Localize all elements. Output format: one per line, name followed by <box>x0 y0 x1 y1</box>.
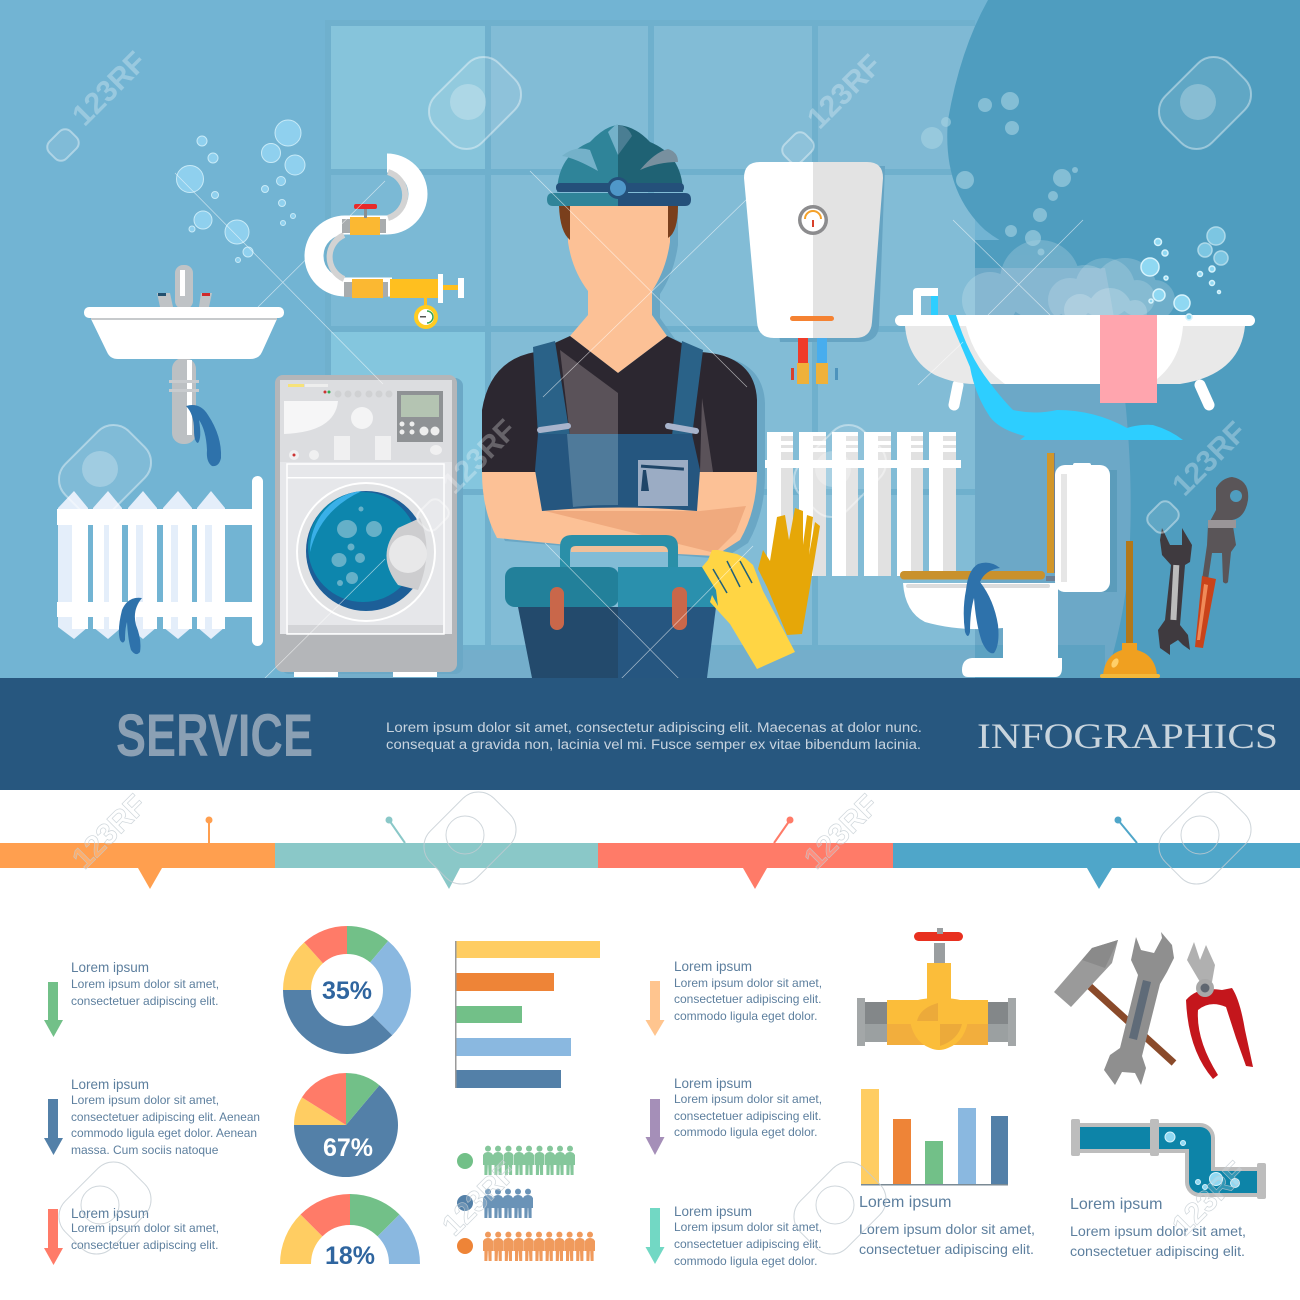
watermarks over illustration: 123RF <box>801 48 888 136</box>
hair <box>559 206 678 240</box>
banner description text: Lorem ipsum dolor sit amet, consectetur adipiscing elit. Maecenas at dolor nunc. <box>386 720 922 735</box>
text block 6: Lorem ipsum <box>674 1204 752 1219</box>
shirt <box>482 336 757 472</box>
banner description text <box>386 720 922 752</box>
blue people row <box>483 1189 533 1218</box>
white lower background <box>0 790 1300 1300</box>
watermarks over illustration: 123RF <box>436 413 523 501</box>
text block 8: Lorem ipsum dolor sit amet, <box>1070 1223 1246 1239</box>
helmet <box>547 124 691 206</box>
radiator right <box>757 432 961 576</box>
icon: pipe valve <box>857 928 1016 1050</box>
icon: hammer, wrench and pliers <box>1054 932 1253 1085</box>
window tiles <box>325 20 975 678</box>
banner heading: infographics: INFOGRAPHICS <box>977 716 1278 756</box>
bubbles over bathtub <box>1141 227 1228 320</box>
watermarks over infographic: 123RF <box>66 788 153 876</box>
banner <box>0 678 1300 790</box>
text block 4: commodo ligula eget dolor. <box>674 1009 817 1023</box>
toilet <box>900 453 1117 677</box>
green people row <box>483 1146 575 1175</box>
rubber gloves <box>702 508 820 669</box>
donut chart 35%: 35% <box>322 977 372 1005</box>
text block 6: commodo ligula eget dolor. <box>674 1254 817 1268</box>
text block 1: Lorem ipsum dolor sit amet, <box>71 977 219 991</box>
text block 3: Lorem ipsum <box>71 1206 149 1221</box>
gauge chart 18% <box>280 1194 420 1270</box>
watermarks over infographic: 123RF <box>798 788 885 876</box>
donut chart 35% <box>297 940 397 1040</box>
text block 3: consectetuer adipiscing elit. <box>71 1238 218 1252</box>
text block 4: consectetuer adipiscing elit. <box>674 992 821 1006</box>
bathtub <box>895 288 1255 440</box>
spanner <box>1104 932 1174 1085</box>
orange people row <box>483 1232 595 1261</box>
icon: leaking pipe <box>1071 1119 1266 1199</box>
text block 4 <box>674 959 822 1023</box>
text block 6 <box>674 1204 822 1268</box>
plumber figure <box>482 124 765 559</box>
arrow: green <box>44 982 63 1037</box>
pie chart 67% <box>294 1073 398 1177</box>
bubbles above sink <box>176 120 305 262</box>
hammer <box>1054 940 1174 1063</box>
overalls <box>533 341 703 511</box>
people chart <box>457 1146 595 1261</box>
watermarks over infographic <box>50 783 1260 1263</box>
gauge chart 18%: 18% <box>325 1242 375 1270</box>
text block 5 <box>674 1076 822 1139</box>
horizontal bar chart <box>455 941 600 1088</box>
text block 1: Lorem ipsum <box>71 960 149 975</box>
thin diagonal watermark lines <box>175 171 1083 690</box>
face and neck <box>568 206 670 373</box>
vertical bar chart <box>861 1089 1008 1186</box>
steam cloud <box>962 240 1175 332</box>
text block 6: Lorem ipsum dolor sit amet, <box>674 1220 822 1234</box>
text block 8: Lorem ipsum <box>1070 1196 1162 1213</box>
text block 5: consectetuer adipiscing elit. <box>674 1109 821 1123</box>
washing machine <box>275 375 463 677</box>
arms <box>482 472 757 556</box>
arrow: purple <box>646 1099 664 1155</box>
water heater <box>744 162 885 384</box>
banner description text: consequat a gravida non, lacinia vel mi. Fusce semper ex vitae bibendum lacinia. <box>386 737 921 752</box>
timeline bar <box>0 816 1300 889</box>
pie chart 67%: 67% <box>323 1134 373 1162</box>
illustration panel: plumber room scene <box>0 0 1300 690</box>
text block 2: Lorem ipsum dolor sit amet, <box>71 1093 219 1107</box>
text block 5: Lorem ipsum <box>674 1076 752 1091</box>
text block 7 <box>859 1194 1035 1257</box>
banner heading: service: SERVICE <box>116 702 313 769</box>
valve pipe <box>314 163 464 329</box>
watermarks over infographic: 123RF <box>1166 1155 1253 1243</box>
text block 2: consectetuer adipiscing elit. Aenean <box>71 1110 260 1124</box>
text block 2: massa. Cum sociis natoque <box>71 1143 219 1157</box>
text block 1 <box>71 960 219 1008</box>
arrow: blue <box>44 1099 63 1155</box>
text block 2: Lorem ipsum <box>71 1077 149 1092</box>
text block 6: consectetuer adipiscing elit. <box>674 1237 821 1251</box>
text block 7: Lorem ipsum dolor sit amet, <box>859 1221 1035 1237</box>
arrow: peach <box>646 981 664 1036</box>
pliers <box>1186 942 1253 1079</box>
text block 2: commodo ligula eget dolor. Aenean <box>71 1126 257 1140</box>
arrow: mint <box>646 1208 664 1264</box>
text block 3 <box>71 1206 219 1252</box>
text block 2 <box>71 1077 260 1157</box>
watermarks over illustration: 123RF <box>66 45 153 133</box>
watermarks over illustration: 123RF <box>1166 415 1253 503</box>
pipe wrench <box>1195 477 1248 648</box>
text block 5: commodo ligula eget dolor. <box>674 1125 817 1139</box>
plunger <box>1100 541 1160 678</box>
text block 8: consectetuer adipiscing elit. <box>1070 1243 1245 1259</box>
text block 5: Lorem ipsum dolor sit amet, <box>674 1092 822 1106</box>
text block 7: consectetuer adipiscing elit. <box>859 1241 1034 1257</box>
sink <box>84 265 284 466</box>
text block 8 <box>1070 1196 1246 1259</box>
text block 7: Lorem ipsum <box>859 1194 951 1211</box>
toolbox <box>505 535 718 678</box>
text block 1: consectetuer adipiscing elit. <box>71 994 218 1008</box>
plumber shadow <box>490 209 765 559</box>
wrench <box>1158 528 1192 655</box>
watermarks over infographic: 123RF <box>436 1155 523 1243</box>
faint bubbles top right <box>921 92 1078 256</box>
radiator left <box>57 476 263 654</box>
text block 3: Lorem ipsum dolor sit amet, <box>71 1221 219 1235</box>
text block 4: Lorem ipsum <box>674 959 752 974</box>
text block 4: Lorem ipsum dolor sit amet, <box>674 976 822 990</box>
watermarks over illustration <box>44 45 1260 536</box>
arrow: red <box>44 1209 63 1265</box>
right dark wall and curtain <box>947 0 1300 680</box>
